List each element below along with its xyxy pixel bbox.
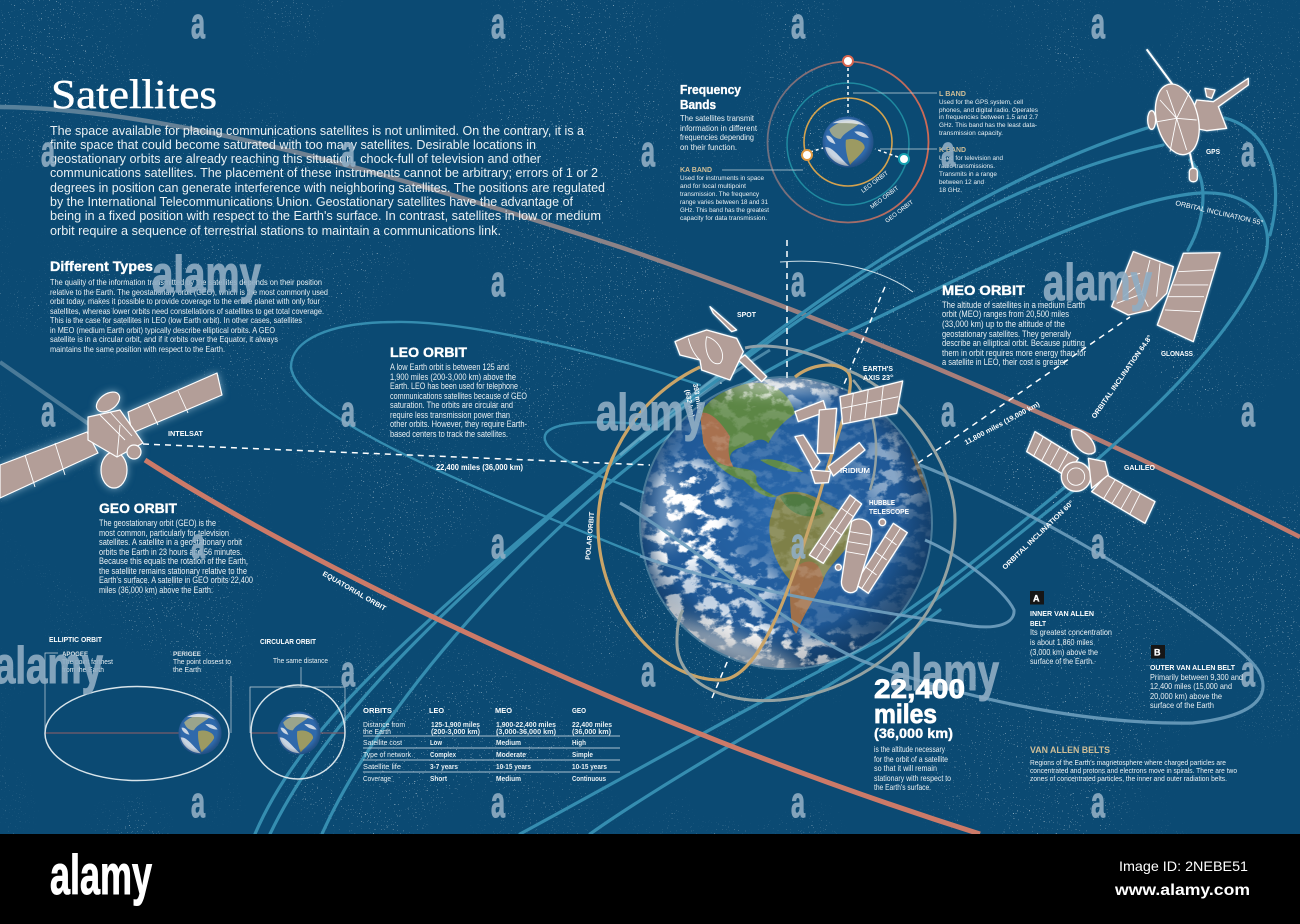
watermarks: a: [641, 127, 655, 176]
orbit comparison table: LEO: [429, 708, 445, 715]
orbit comparison table: GEO: [572, 708, 586, 715]
geo orbit text: satellites. A satellite in a geostationary orbit: [99, 537, 242, 547]
satellite labels: GPS: [1206, 149, 1220, 156]
watermarks: a: [1091, 0, 1105, 48]
22,400 miles callout: stationary with respect to: [874, 773, 951, 783]
frequency bands text: in frequencies between 1.5 and 2.7: [939, 114, 1038, 121]
geo orbit text: most common, particularly for television: [99, 528, 229, 538]
satellite: glonass: [1112, 252, 1220, 342]
satellite: hubble: [809, 495, 907, 593]
meo orbit text: MEO ORBIT: [942, 282, 1025, 298]
equatorial orbit: [145, 460, 980, 834]
grey orbit behind earth: [745, 346, 847, 370]
22,400 miles callout: for the orbit of a satellite: [874, 754, 948, 764]
different types: [50, 258, 328, 354]
orbit comparison table: 3-7 years: [430, 762, 458, 771]
communication orbits: [255, 118, 1276, 834]
orbit comparison table: (3,000-36,000 km): [496, 727, 556, 736]
frequency bands text: Used for television and: [939, 155, 1003, 162]
inner van allen belt: BELT: [1030, 619, 1046, 628]
meo orbit text: them in orbit requires more energy than for: [942, 348, 1086, 358]
orbit comparison table: (200-3,000 km): [431, 727, 480, 736]
intro text: geostationary orbits are already reaching this situation, chock-full of television and other: [50, 151, 542, 166]
elliptic orbit diagram: from the Earth: [62, 665, 104, 674]
satellite: intelsat: [0, 373, 222, 498]
leo orbit text: Earth. LEO has been used for telephone: [390, 381, 518, 391]
orbit labels: 22,400 miles (36,000 km): [436, 463, 523, 472]
outer van allen belt: OUTER VAN ALLEN BELT: [1150, 663, 1235, 672]
intro text: finite space that could become saturated with too many satellites. Desirable locations in: [50, 137, 536, 152]
equatorial orbit, far side: [0, 107, 1300, 537]
satellite labels: [168, 149, 1220, 516]
different types: satellites, whereas lower orbits need constellations of satellites to get total coverage.: [50, 306, 324, 316]
geo orbit text: orbits the Earth in 23 hours and 56 minutes.: [99, 547, 242, 557]
satellite labels: AXIS 23°: [863, 374, 893, 382]
watermarks: a: [491, 0, 505, 48]
outer van allen belt: B: [1154, 648, 1161, 658]
elliptic orbit diagram: The point farthest: [62, 657, 114, 666]
axis and range dashes: [143, 240, 1130, 698]
land: Americas: [700, 383, 929, 633]
orbit comparison table: Continuous: [572, 774, 606, 783]
watermarks: a: [41, 127, 55, 176]
upper-left orbit fragment: [0, 362, 90, 425]
different types: relative to the Earth. The geostationary orbit (GEO), which is the most commonly used: [50, 287, 328, 297]
leo orbit text: other orbits. However, they require Earth-: [390, 419, 527, 429]
orbit labels: 11,800 miles (19,000 km): [964, 401, 1041, 447]
orbit comparison table: MEO: [495, 708, 513, 715]
elliptic orbit diagram: The point closest to: [173, 657, 231, 666]
frequency bands text: information in different: [680, 124, 758, 133]
watermarks: a: [41, 387, 55, 436]
frequency bands text: KA BAND: [680, 165, 713, 174]
frequency bands text: K BAND: [939, 145, 967, 154]
watermarks: a: [941, 127, 955, 176]
circular orbit diagram: [250, 639, 345, 779]
meo orbit text: The altitude of satellites in a medium Earth: [942, 300, 1085, 310]
geo orbit text: Earth's surface. A satellite in GEO orbits 22,400: [99, 575, 253, 585]
satellite: spot: [675, 307, 767, 382]
frequency bands diagram: GEO ORBIT: [885, 200, 915, 225]
orbit labels: EQUATORIAL ORBIT: [321, 571, 387, 613]
leo orbit text: LEO ORBIT: [390, 344, 467, 360]
inner van allen belt: is about 1,860 miles: [1030, 637, 1093, 647]
intro text: degrees in position can generate interference with neighboring satellites. The positions are regulated: [50, 180, 605, 195]
watermarks: a: [791, 0, 805, 48]
leo orbit text: A low Earth orbit is between 125 and: [390, 362, 509, 372]
orbit comparison table: Medium: [496, 774, 521, 783]
orbit comparison table: Medium: [496, 738, 521, 747]
frequency bands text: Transmits in a range: [939, 171, 997, 178]
22,400 miles callout: so that it will remain: [874, 763, 937, 773]
geo orbit text: The geostationary orbit (GEO) is the: [99, 518, 216, 528]
watermarks: alamy: [1043, 254, 1152, 312]
different types: This is the case for satellites in LEO (low Earth orbit). In other cases, satellites: [50, 315, 302, 325]
frequency bands text: GHz. This band has the least data-: [939, 122, 1037, 129]
van allen belts and orbits passing in front of earth: [598, 350, 1263, 723]
22,400 miles callout: miles: [874, 699, 937, 729]
frequency bands text: GHz. This band has the greatest: [680, 207, 769, 214]
watermarks: a: [791, 778, 805, 827]
frequency bands text: on their function.: [680, 143, 737, 152]
frequency bands text: 18 GHz.: [939, 187, 962, 194]
satellite: galileo: [1027, 429, 1155, 523]
orbit labels: (632 km): [683, 389, 695, 418]
geo orbit text: miles (36,000 km) above the Earth.: [99, 585, 213, 595]
elliptic orbit diagram: [45, 637, 231, 780]
frequency bands text: transmission capacity.: [939, 130, 1003, 137]
frequency bands text: L BAND: [939, 89, 967, 98]
van allen belts text: VAN ALLEN BELTS: [1030, 745, 1110, 755]
van allen belts text: zones of concentrated particles, the inner and outer radiation belts.: [1030, 774, 1227, 783]
geo orbit text: [99, 500, 253, 595]
frequency bands text: capacity for data transmission.: [680, 215, 767, 222]
earth: [636, 373, 936, 692]
elliptic orbit diagram: ELLIPTIC ORBIT: [49, 637, 103, 644]
meo orbit text: orbit (MEO) ranges from 20,500 miles: [942, 309, 1069, 319]
meo orbit text: [942, 282, 1086, 367]
22,400 miles callout: (36,000 km): [874, 725, 953, 741]
van allen belts text: Regions of the Earth's magnetosphere where charged particles are: [1030, 758, 1226, 767]
footer bar: alamy: [50, 843, 152, 906]
watermarks: a: [1241, 387, 1255, 436]
outer van allen belt: 12,400 miles (15,000 and: [1150, 681, 1232, 691]
watermarks: a: [341, 387, 355, 436]
van allen belts text: [1030, 745, 1237, 783]
watermarks: a: [791, 257, 805, 306]
frequency bands diagram: [722, 56, 937, 225]
intro text: [50, 123, 605, 238]
inner van allen belt: [1030, 591, 1112, 666]
orbit labels: ORBITAL INCLINATION 55°: [1175, 199, 1264, 227]
elliptic orbit diagram: the Earth: [173, 665, 201, 674]
frequency bands text: phones, and digital radio. Operates: [939, 107, 1039, 114]
meo orbit text: (33,000 km) up to the altitude of the: [942, 319, 1065, 329]
different types: The quality of the information transmitted by the satellites depends on their position: [50, 277, 322, 287]
watermarks: a: [1241, 647, 1255, 696]
satellite labels: INTELSAT: [168, 431, 204, 438]
orbit comparison table: Short: [430, 774, 447, 783]
orbit comparison table: Type of network: [363, 750, 411, 759]
watermarks: a: [341, 127, 355, 176]
frequency bands text: and for local multipoint: [680, 183, 746, 190]
orbit comparison table: Coverage: [363, 774, 391, 783]
geo orbit text: the satellite remains stationary relative to the: [99, 566, 247, 576]
inner van allen belt: Its greatest concentration: [1030, 627, 1112, 637]
outer van allen belt: [1150, 645, 1243, 710]
meo orbit text: describe an elliptical orbit. Because putting: [942, 338, 1085, 348]
satellite labels: HUBBLE: [869, 500, 895, 507]
satellite labels: GLONASS: [1161, 351, 1193, 358]
satellite labels: IRIDIUM: [840, 468, 870, 475]
frequency bands diagram: LEO ORBIT: [861, 170, 890, 195]
footer bar: www.alamy.com: [1114, 882, 1250, 899]
orbit comparison table: [363, 708, 620, 783]
clouds: [636, 373, 936, 673]
watermarks: a: [1241, 127, 1255, 176]
leo orbit text: [390, 344, 527, 439]
leo orbit text: based centers to track the satellites.: [390, 429, 508, 439]
different types: Different Types: [50, 258, 153, 274]
22,400 miles callout: is the altitude necessary: [874, 744, 946, 754]
meo orbit text: a satellite in LEO, their cost is greater.: [942, 357, 1068, 367]
orbit comparison table: High: [572, 738, 586, 747]
meo orbit text: geostationary satellites. They generally: [942, 329, 1071, 339]
different types: in MEO (medium Earth orbit) typically describe elliptical orbits. A GEO: [50, 325, 275, 335]
orbit comparison table: 22,400 miles: [572, 720, 612, 729]
orbit comparison table: Satellite cost: [363, 738, 403, 747]
orbit comparison table: Low: [430, 738, 442, 747]
leo orbit text: communications satellites because of GEO: [390, 391, 527, 401]
orbit comparison table: Distance from: [363, 720, 405, 729]
22,400 miles callout: 22,400: [874, 674, 965, 704]
intro text: being in a fixed position with respect to the Earth's surface. In contrast, satellites in low or medium: [50, 208, 601, 223]
frequency bands text: Frequency: [680, 82, 742, 97]
elliptic orbit diagram: APOGEE: [62, 651, 89, 658]
frequency bands text: [680, 82, 1039, 222]
frequency bands text: radio transmissions.: [939, 163, 995, 170]
watermarks: a: [941, 387, 955, 436]
different types: satellite is in a circular orbit, and if it orbits over the Equator, it always: [50, 334, 278, 344]
small earth: [823, 117, 873, 167]
intro text: The space available for placing communications satellites is not unlimited. On the contrary, it is a: [50, 123, 585, 138]
frequency bands text: Used for the GPS system, cell: [939, 99, 1024, 106]
intro text: by the International Telecommunications Union. Geostationary satellites have the advantage of: [50, 194, 573, 209]
orbit comparison table: Satellite life: [363, 762, 401, 771]
inner van allen belt: (3,000 km) above the: [1030, 647, 1098, 657]
different types: maintains the same position with respect to the Earth.: [50, 344, 225, 354]
orbit comparison table: Simple: [572, 750, 593, 759]
geo orbit text: Because this equals the rotation of the Earth,: [99, 556, 248, 566]
circular orbit diagram: The same distance: [273, 656, 328, 665]
leo orbit text: 1,900 miles (200-3,000 km) above the: [390, 372, 516, 382]
frequency bands diagram: MEO ORBIT: [870, 185, 900, 211]
satellite: iridium: [795, 381, 903, 483]
satellite labels: EARTH'S: [863, 366, 893, 373]
watermarks: alamy: [890, 644, 999, 702]
orbit labels: 393 miles: [691, 383, 703, 414]
22,400 miles callout: the Earth's surface.: [874, 782, 931, 792]
orbit comparison table: ORBITS: [363, 708, 392, 715]
inner van allen belt: surface of the Earth.: [1030, 656, 1094, 666]
inner van allen belt: INNER VAN ALLEN: [1030, 609, 1094, 618]
watermarks: a: [1091, 519, 1105, 568]
different types: orbit today, makes it possible to provide coverage to the entire planet with only four: [50, 296, 320, 306]
watermarks: a: [191, 519, 205, 568]
orbit labels: ORBITAL INCLINATION 64.8°: [1090, 333, 1154, 420]
orbit labels: POLAR ORBIT: [585, 511, 596, 560]
footer bar: [0, 834, 1300, 924]
watermarks: a: [491, 778, 505, 827]
orbit comparison table: Moderate: [496, 750, 526, 759]
orbit comparison table: the Earth: [363, 727, 391, 736]
leo orbit text: saturation. The orbits are circular and: [390, 400, 513, 410]
satellite labels: GALILEO: [1124, 465, 1156, 472]
circular orbit diagram: CIRCULAR ORBIT: [260, 639, 317, 646]
van allen belts text: concentrated and protons and electrons move in spirals. There are two: [1030, 766, 1237, 775]
orbit labels: [321, 199, 1264, 613]
satellite labels: SPOT: [737, 312, 757, 319]
frequency bands text: range varies between 18 and 31: [680, 199, 768, 206]
outer van allen belt: 20,000 km) above the: [1150, 691, 1222, 701]
orbit comparison table: (36,000 km): [572, 727, 611, 736]
watermarks: a: [791, 519, 805, 568]
satellite labels: TELESCOPE: [869, 509, 909, 516]
watermarks: a: [491, 519, 505, 568]
orbit comparison table: 125-1,900 miles: [431, 720, 480, 729]
outer van allen belt: surface of the Earth: [1150, 700, 1214, 710]
watermarks: a: [341, 647, 355, 696]
orbit comparison table: Complex: [430, 750, 457, 759]
inner van allen belt: A: [1033, 594, 1040, 604]
satellite: gps: [1147, 49, 1248, 182]
elliptic orbit diagram: PERIGEE: [173, 651, 202, 658]
watermarks: a: [491, 257, 505, 306]
frequency bands text: The satellites transmit: [680, 114, 755, 123]
intro text: orbit require a sequence of terrestrial stations to maintain a communications link.: [50, 223, 501, 238]
frequency bands text: Used for instruments in space: [680, 175, 764, 182]
title: Satellites: [51, 71, 217, 117]
outer van allen belt: Primarily between 9,300 and: [1150, 672, 1243, 682]
frequency bands text: between 12 and: [939, 179, 984, 186]
watermarks: a: [641, 647, 655, 696]
watermarks: a: [191, 778, 205, 827]
geo orbit text: GEO ORBIT: [99, 500, 177, 516]
22,400 miles callout: [874, 674, 965, 792]
watermarks: alamy: [152, 246, 261, 304]
leo orbit text: require less transmission power than: [390, 410, 510, 420]
orbit comparison table: 10-15 years: [572, 762, 607, 771]
frequency bands text: Bands: [680, 97, 716, 112]
intro text: communications satellites. The placement of these instruments cannot be arbitrary; errors of 1 or 2: [50, 165, 598, 180]
orbit comparison table: 10-15 years: [496, 762, 531, 771]
watermarks: alamy: [596, 384, 705, 442]
watermarks: a: [191, 0, 205, 48]
watermarks: a: [1091, 778, 1105, 827]
footer bar: Image ID: 2NEBE51: [1119, 858, 1248, 874]
orbit labels: ORBITAL INCLINATION 60°: [1001, 499, 1076, 571]
frequency bands text: frequencies depending: [680, 133, 754, 142]
frequency bands text: transmission. The frequency: [680, 191, 760, 198]
orbit comparison table: 1,900-22,400 miles: [496, 720, 556, 729]
